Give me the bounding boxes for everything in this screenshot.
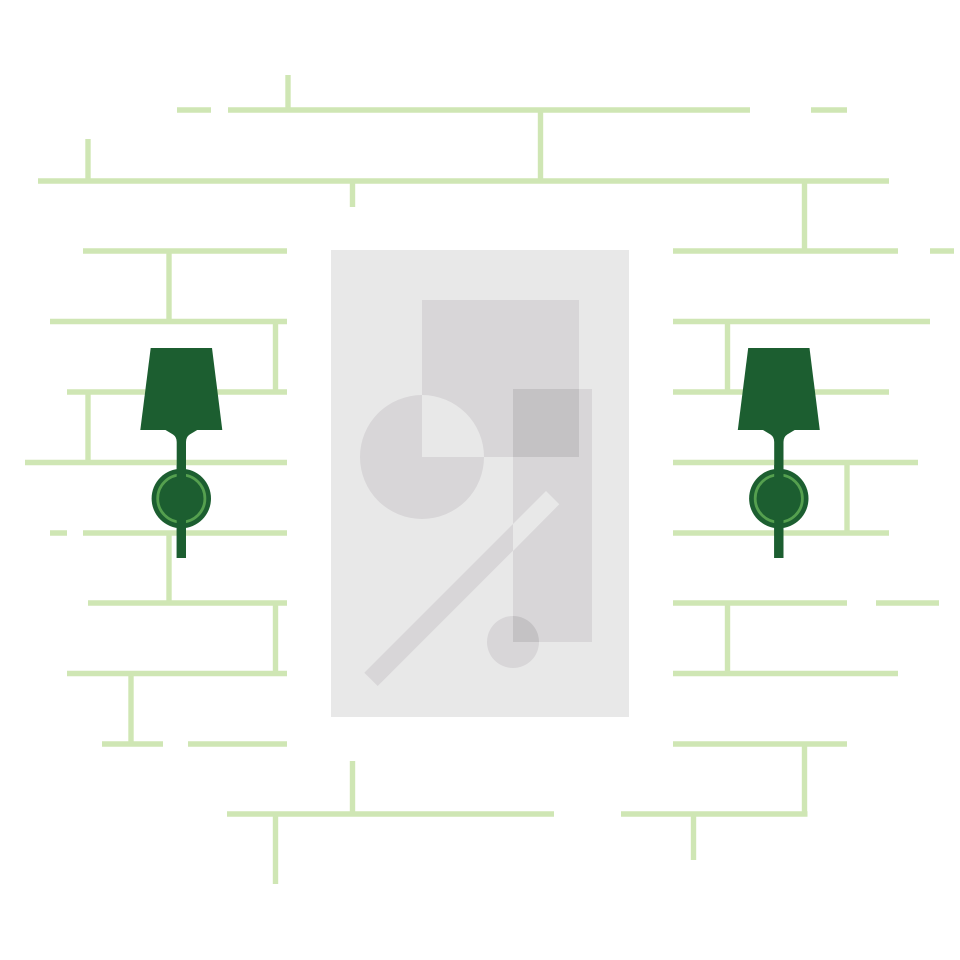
lamp shade xyxy=(140,348,222,430)
lamp neck xyxy=(166,430,197,558)
small circle overlap xyxy=(513,616,539,642)
wall plate xyxy=(152,469,211,528)
square and rectangle overlap xyxy=(513,389,579,457)
large circle with cut quadrant xyxy=(360,395,484,519)
plate ring xyxy=(158,475,205,522)
large square xyxy=(422,300,579,457)
lamp stem xyxy=(177,465,186,558)
lamp stem xyxy=(774,465,784,558)
diagonal bar xyxy=(364,491,559,686)
wall plate xyxy=(749,469,808,528)
left wall sconce xyxy=(140,348,222,558)
artwork background panel xyxy=(331,250,629,717)
framed abstract artwork xyxy=(331,250,629,717)
lamp shade xyxy=(738,348,820,430)
diagonal bar overlap xyxy=(513,491,559,551)
circle quadrant highlight xyxy=(422,395,484,457)
plate ring xyxy=(755,475,802,522)
tall rectangle xyxy=(513,389,592,642)
lamp neck xyxy=(763,430,795,558)
small circle xyxy=(487,616,539,668)
right wall sconce xyxy=(738,348,820,558)
